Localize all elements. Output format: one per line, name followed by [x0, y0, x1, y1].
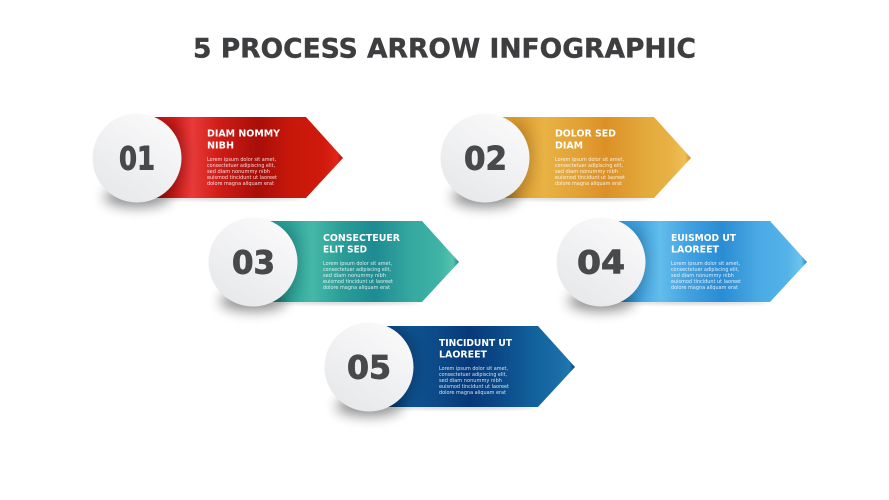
body text: step 02: Lorem ipsum dolor sit amet, [555, 157, 624, 163]
body text: step 03: sed diam nonummy nibh [323, 273, 386, 279]
body text: step 01: sed diam nonummy nibh [207, 169, 270, 175]
body text: step 04: dolore magna aliquam erat [671, 285, 738, 291]
body text: step 04 [671, 261, 741, 291]
heading: step 03 [323, 233, 400, 256]
heading: step 03: ELIT SED [323, 244, 367, 256]
heading: step 05: TINCIDUNT UT [439, 338, 512, 349]
body text: step 02: consectetuer adipiscing elit, [555, 163, 623, 169]
number disc 02: 02 [464, 140, 507, 178]
heading: step 02 [555, 128, 616, 152]
body text: step 02: dolore magna aliquam erat [555, 181, 622, 187]
number disc 02 [440, 114, 530, 202]
body text: step 03: consectetuer adipiscing elit, [323, 267, 391, 273]
number disc 04 [556, 218, 646, 306]
body text: step 05: sed diam nonummy nibh [439, 378, 502, 384]
body text: step 01: euismod tincidunt ut laoreet [207, 175, 277, 181]
body text: step 04: euismod tincidunt ut laoreet [671, 279, 741, 285]
heading: step 03: CONSECTEUER [323, 233, 400, 244]
heading: step 04 [671, 233, 736, 256]
number disc 05 [324, 322, 414, 412]
panel: step 03 [208, 218, 459, 311]
number disc 01: 01 [119, 140, 155, 178]
heading: step 05 [439, 338, 512, 360]
body text: step 03: Lorem ipsum dolor sit amet, [323, 261, 392, 267]
body text: step 05 [439, 366, 509, 396]
heading: step 01: DIAM NOMMY [207, 128, 281, 140]
number disc 05: 05 [347, 348, 391, 386]
arrow: teal [266, 221, 459, 302]
number disc 03 [208, 218, 298, 306]
body text: step 05: euismod tincidunt ut laoreet [439, 384, 509, 390]
body text: step 02 [555, 157, 625, 187]
heading: step 04: LAOREET [671, 244, 719, 256]
body text: step 01: Lorem ipsum dolor sit amet, [207, 157, 276, 163]
heading: step 02: DIAM [555, 140, 583, 152]
heading: step 01: NIBH [207, 140, 234, 152]
body text: step 01 [207, 157, 277, 187]
heading: step 01 [207, 128, 281, 152]
heading: step 05: LAOREET [439, 350, 487, 360]
number disc 01 [92, 114, 182, 202]
body text: step 03 [323, 261, 393, 291]
heading: step 02: DOLOR SED [555, 128, 616, 140]
arrow: sky blue [614, 221, 807, 302]
body text: step 03: dolore magna aliquam erat [323, 285, 390, 291]
number disc 03: 03 [232, 244, 275, 282]
arrow: red [150, 117, 343, 198]
title: 5 PROCESS ARROW INFOGRAPHIC [193, 34, 696, 64]
panel: step 04 [556, 218, 807, 311]
body text: step 04: Lorem ipsum dolor sit amet, [671, 261, 740, 267]
panel: step 05 [324, 322, 575, 416]
body text: step 01: dolore magna aliquam erat [207, 181, 274, 187]
body text: step 02: sed diam nonummy nibh [555, 169, 618, 175]
body text: step 01: consectetuer adipiscing elit, [207, 163, 275, 169]
arrow: gold [498, 117, 691, 198]
panel: step 02 [440, 114, 691, 207]
body text: step 02: euismod tincidunt ut laoreet [555, 175, 625, 181]
body text: step 05: Lorem ipsum dolor sit amet, [439, 366, 508, 372]
body text: step 04: consectetuer adipiscing elit, [671, 267, 739, 273]
panel: step 01 [92, 114, 343, 207]
number disc 04: 04 [577, 244, 625, 282]
body text: step 05: dolore magna aliquam erat [439, 390, 506, 396]
body text: step 05: consectetuer adipiscing elit, [439, 372, 507, 378]
body text: step 03: euismod tincidunt ut laoreet [323, 279, 393, 285]
heading: step 04: EUISMOD UT [671, 233, 736, 244]
arrow: navy [382, 326, 575, 407]
body text: step 04: sed diam nonummy nibh [671, 273, 734, 279]
